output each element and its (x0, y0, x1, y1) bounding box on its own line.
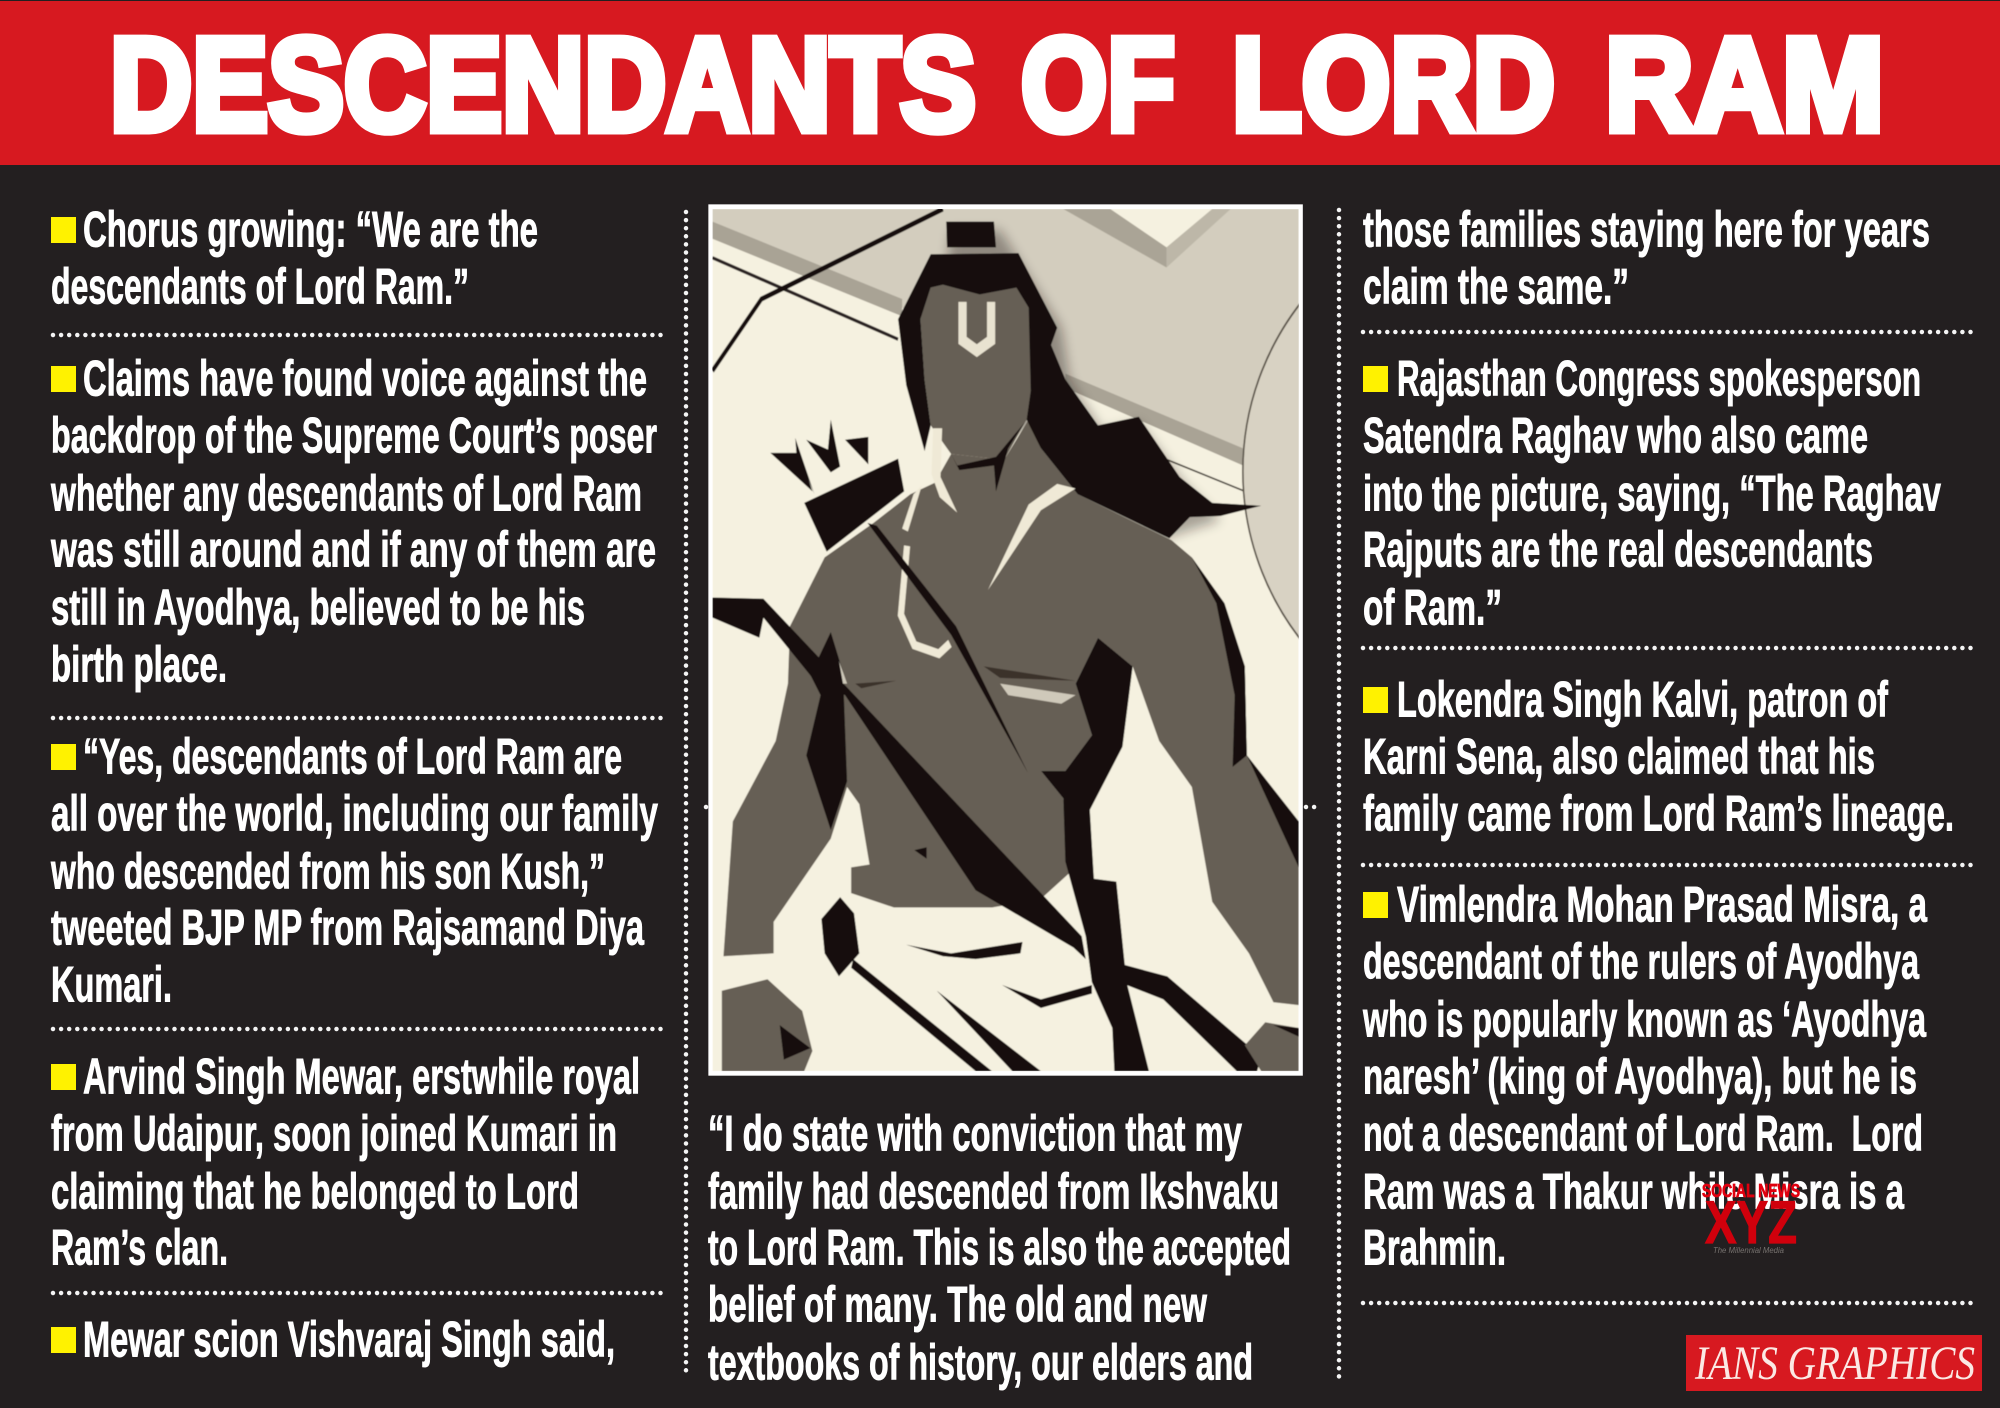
watermark: Social News XYZ: The Millennial Media (1713, 1246, 1785, 1255)
item: families claim: claim the same.” (1363, 258, 1629, 314)
item: Arvind Singh Mewar: Arvind Singh Mewar, erstwhile royal (83, 1048, 640, 1104)
item: Diya Kumari (50, 728, 658, 1012)
title: LORD (1232, 11, 1555, 158)
item: Diya Kumari: “Yes, descendants of Lord Ram are (83, 728, 622, 784)
item: supreme court poser: birth place. (51, 636, 227, 692)
item: supreme court poser: was still around and if any of them are (50, 522, 656, 578)
item: supreme court poser: backdrop of the Supreme Court’s poser (51, 408, 657, 464)
title banner (0, 1, 2000, 165)
middle column quote: belief of many. The old and new (708, 1276, 1207, 1332)
item: Arvind Singh Mewar: claiming that he belonged to Lord (51, 1164, 579, 1220)
item: supreme court poser: whether any descendants of Lord Ram (50, 466, 642, 522)
right column (1362, 202, 1971, 1303)
middle column quote: to Lord Ram. This is also the accepted (708, 1220, 1291, 1276)
item: Diya Kumari: Kumari. (51, 956, 172, 1012)
item: families claim (1363, 202, 1930, 314)
item: Arvind Singh Mewar: from Udaipur, soon joined Kumari in (51, 1106, 617, 1162)
middle column quote: textbooks of history, our elders and (708, 1334, 1253, 1390)
watermark: Social News XYZ: SOCIAL NEWS (1702, 1181, 1800, 1201)
item: Vishvaraj Singh (51, 1312, 615, 1368)
item: Diya Kumari: tweeted BJP MP from Rajsamand Diya (51, 900, 645, 956)
item: Arvind Singh Mewar (51, 1048, 640, 1276)
item: Vishvaraj Singh: Mewar scion Vishvaraj Singh said, (83, 1312, 615, 1368)
watermark: Social News XYZ: XYZ (1705, 1189, 1797, 1256)
item: chorus growing: descendants of Lord Ram.” (51, 258, 469, 314)
item: supreme court poser: still in Ayodhya, believed to be his (51, 580, 585, 636)
item: chorus growing (51, 202, 538, 314)
middle column quote: “I do state with conviction that my (708, 1106, 1242, 1162)
item: Lokendra Singh Kalvi (1363, 672, 1954, 842)
title (110, 11, 1884, 158)
title: RAM (1605, 11, 1884, 158)
title: OF (1021, 11, 1175, 158)
item: supreme court poser: Claims have found voice against the (83, 350, 647, 406)
item: Diya Kumari: all over the world, including our family (51, 786, 658, 842)
middle column quote: family had descended from Ikshvaku (708, 1164, 1279, 1220)
item: Vimlendra Mohan Prasad Misra: Brahmin. (1363, 1220, 1506, 1276)
middle column quote (708, 1106, 1291, 1390)
item: Vimlendra Mohan Prasad Misra (1362, 876, 1928, 1276)
item: Satendra Raghav (1363, 350, 1941, 636)
left column (50, 202, 661, 1368)
item: supreme court poser (50, 350, 657, 692)
title: DESCENDANTS (110, 11, 976, 158)
item: Satendra Raghav: of Ram.” (1363, 580, 1502, 636)
item: Diya Kumari: who descended from his son Kush,” (50, 844, 605, 900)
item: Arvind Singh Mewar: Ram’s clan. (51, 1220, 228, 1276)
illustration: Lord Ram with bow and quiver (708, 204, 1303, 1076)
item: chorus growing: Chorus growing: “We are the (83, 202, 538, 258)
